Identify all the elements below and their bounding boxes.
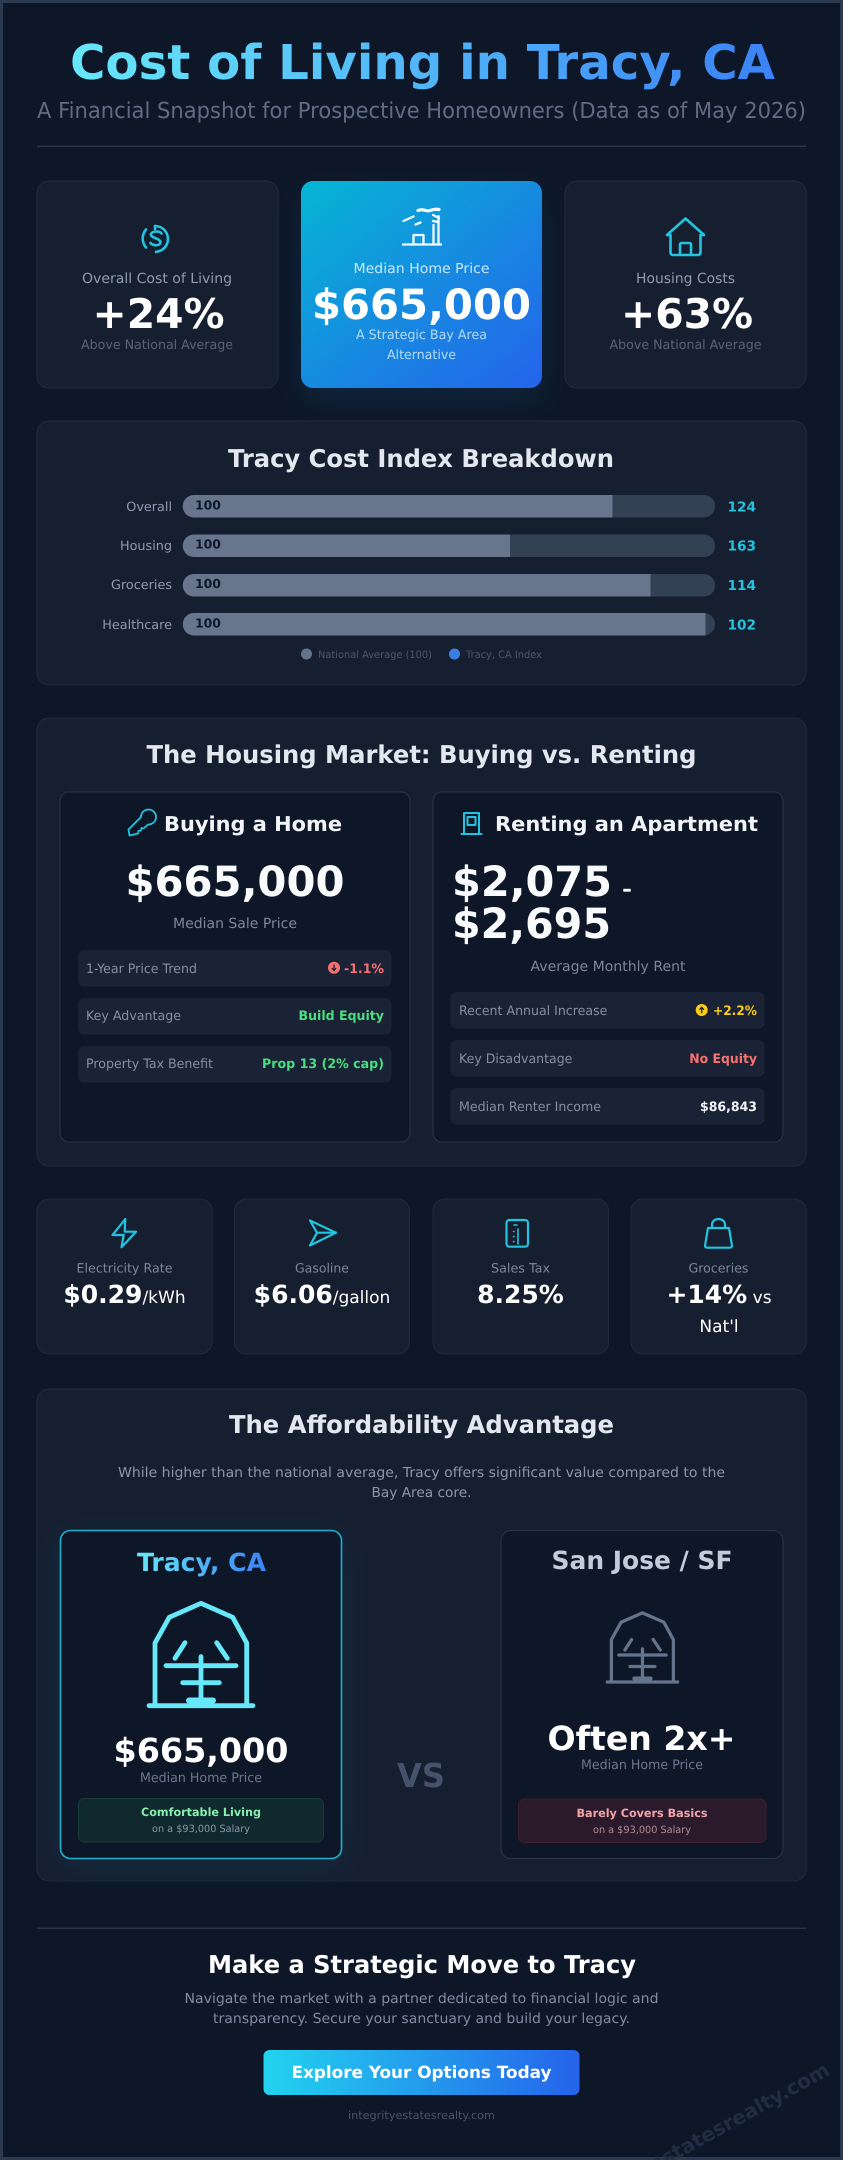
price: Often 2x+ — [548, 1719, 736, 1758]
stat card: overall cost of living — [37, 181, 278, 388]
glow behind Tracy card — [60, 1540, 342, 1865]
row: price trend: -1.1% — [344, 962, 384, 977]
bar: housing: 100 — [195, 537, 221, 552]
title: Cost of Living in Tracy, CA — [70, 35, 775, 91]
caption: Median Home Price — [140, 1771, 262, 1786]
bar: healthcare — [102, 613, 756, 636]
bar: healthcare: 100 — [195, 615, 221, 630]
heading: The Affordability Advantage — [229, 1410, 614, 1439]
value: $2,075 — [452, 857, 612, 906]
icon: house — [667, 218, 704, 255]
row: renter income: Median Renter Income — [459, 1100, 601, 1115]
card: gasoline — [234, 1199, 410, 1354]
badge: barely covers basics: Barely Covers Basics — [576, 1806, 708, 1820]
body text — [184, 1991, 658, 2027]
bar: housing: 163 — [728, 539, 756, 555]
card: groceries — [631, 1199, 806, 1354]
row: annual increase — [450, 992, 764, 1028]
icon: key — [128, 810, 156, 836]
glow behind median price card — [301, 195, 542, 400]
icon: palm house — [149, 1603, 253, 1706]
row: property tax benefit: Property Tax Benefit — [86, 1057, 213, 1072]
bar: healthcare: Healthcare — [102, 618, 172, 633]
icon: palm house — [403, 209, 441, 244]
card: Tracy — [60, 1530, 342, 1858]
button: Explore Your Options Today — [292, 2062, 552, 2082]
legend — [301, 648, 542, 661]
card: renting an apartment — [433, 792, 783, 1142]
icon: lightning — [112, 1219, 136, 1247]
icon: palm house — [607, 1613, 678, 1682]
caption: Median Sale Price — [173, 916, 297, 932]
badge: barely covers basics: on a $93,000 Salary — [593, 1825, 691, 1836]
value: $0.29/kWh — [63, 1280, 186, 1309]
heading: Buying a Home — [164, 812, 342, 836]
icon: receipt — [506, 1220, 528, 1247]
row: key advantage: Build Equity — [298, 1009, 385, 1024]
value: +63% — [621, 290, 753, 338]
caption: Average Monthly Rent — [530, 959, 686, 975]
label: Electricity Rate — [76, 1262, 173, 1277]
label: Overall Cost of Living — [82, 271, 232, 287]
bar: groceries: Groceries — [111, 578, 172, 593]
row: property tax benefit — [78, 1046, 392, 1082]
vs label: VS — [397, 1756, 445, 1795]
body text: transparency. Secure your sanctuary and build your legacy. — [213, 2011, 630, 2027]
body text: Navigate the market with a partner dedicated to financial logic and — [184, 1991, 658, 2007]
price: $665,000 — [114, 1731, 288, 1770]
panel: affordability advantage — [37, 1389, 806, 1881]
caption: Median Home Price — [581, 1758, 703, 1773]
icon: paper plane — [310, 1220, 336, 1246]
bar: healthcare: 102 — [728, 618, 756, 634]
row: price trend: 1-Year Price Trend — [86, 962, 197, 977]
stat card: median home price — [301, 181, 542, 388]
intro text — [118, 1465, 725, 1501]
bar: groceries: 100 — [195, 576, 221, 591]
bar: overall: 124 — [728, 500, 756, 516]
label: Gasoline — [295, 1262, 349, 1277]
label: Sales Tax — [491, 1262, 550, 1277]
card: sales tax — [433, 1199, 608, 1354]
bar: overall: Overall — [126, 500, 172, 515]
row: price trend — [78, 950, 392, 986]
button — [264, 2050, 580, 2095]
intro text: Bay Area core. — [372, 1485, 472, 1501]
heading: Tracy Cost Index Breakdown — [228, 444, 614, 473]
row: renter income: $86,843 — [700, 1100, 757, 1115]
panel: housing market — [37, 718, 806, 1166]
badge: barely covers basics — [518, 1799, 766, 1842]
card: renting an apartment: $2,695 — [452, 899, 611, 948]
label: Housing Costs — [636, 271, 735, 287]
note: Above National Average — [610, 338, 762, 353]
note: Above National Average — [81, 338, 233, 353]
card: groceries: Nat'l — [699, 1317, 739, 1337]
heading: The Housing Market: Buying vs. Renting — [146, 740, 696, 769]
value: $665,000 — [312, 280, 531, 329]
row: key disadvantage — [450, 1040, 764, 1076]
card: buying a home — [60, 792, 410, 1142]
row: key disadvantage: No Equity — [689, 1052, 757, 1067]
row: annual increase: Recent Annual Increase — [459, 1004, 607, 1019]
row: key disadvantage: Key Disadvantage — [459, 1052, 572, 1067]
value: 8.25% — [477, 1280, 564, 1309]
badge: comfortable living: Comfortable Living — [141, 1805, 261, 1819]
legend: National Average (100) — [318, 650, 432, 661]
icon: shopping bag — [705, 1219, 732, 1248]
value: $6.06/gallon — [254, 1280, 390, 1309]
subtitle: A Financial Snapshot for Prospective Homeowners (Data as of May 2026) — [37, 99, 806, 124]
value: +24% — [92, 290, 224, 338]
footer call to action — [184, 1950, 658, 2122]
heading: Make a Strategic Move to Tracy — [208, 1950, 636, 1979]
value: +14% vs — [666, 1280, 772, 1309]
row: annual increase: +2.2% — [713, 1004, 757, 1019]
badge: comfortable living: on a $93,000 Salary — [152, 1824, 250, 1835]
website: integrityestatesrealty.com — [348, 2109, 495, 2122]
bar: groceries — [111, 574, 756, 596]
label: Groceries — [688, 1262, 749, 1277]
intro text: While higher than the national average, Tracy offers significant value compared to the — [118, 1465, 725, 1481]
bar: overall: 100 — [195, 497, 221, 512]
heading: Renting an Apartment — [495, 812, 758, 836]
header — [37, 35, 806, 124]
card: San Jose / SF — [501, 1530, 783, 1858]
bar: groceries: 114 — [728, 578, 756, 594]
row: property tax benefit: Prop 13 (2% cap) — [262, 1057, 384, 1072]
bar: housing: Housing — [120, 539, 172, 554]
icon: dollar cycle — [143, 226, 168, 252]
bar: housing — [120, 534, 756, 557]
badge: comfortable living — [78, 1798, 324, 1842]
value: $665,000 — [126, 857, 344, 906]
row: key advantage: Key Advantage — [86, 1009, 181, 1024]
panel: cost index breakdown — [37, 421, 806, 685]
row: key advantage — [78, 998, 392, 1034]
legend: Tracy, CA Index — [465, 650, 542, 661]
card: electricity rate — [37, 1199, 212, 1354]
bar: overall — [126, 495, 756, 518]
card: renting an apartment: - — [622, 877, 632, 901]
icon: door — [462, 813, 482, 834]
note: A Strategic Bay Area — [356, 328, 487, 343]
city name: San Jose / SF — [552, 1546, 732, 1575]
stat card: median home price: Alternative — [387, 348, 456, 363]
label: Median Home Price — [354, 261, 490, 277]
stat card: housing costs — [565, 181, 806, 388]
city name: Tracy, CA — [137, 1548, 267, 1577]
row: renter income — [450, 1088, 764, 1124]
